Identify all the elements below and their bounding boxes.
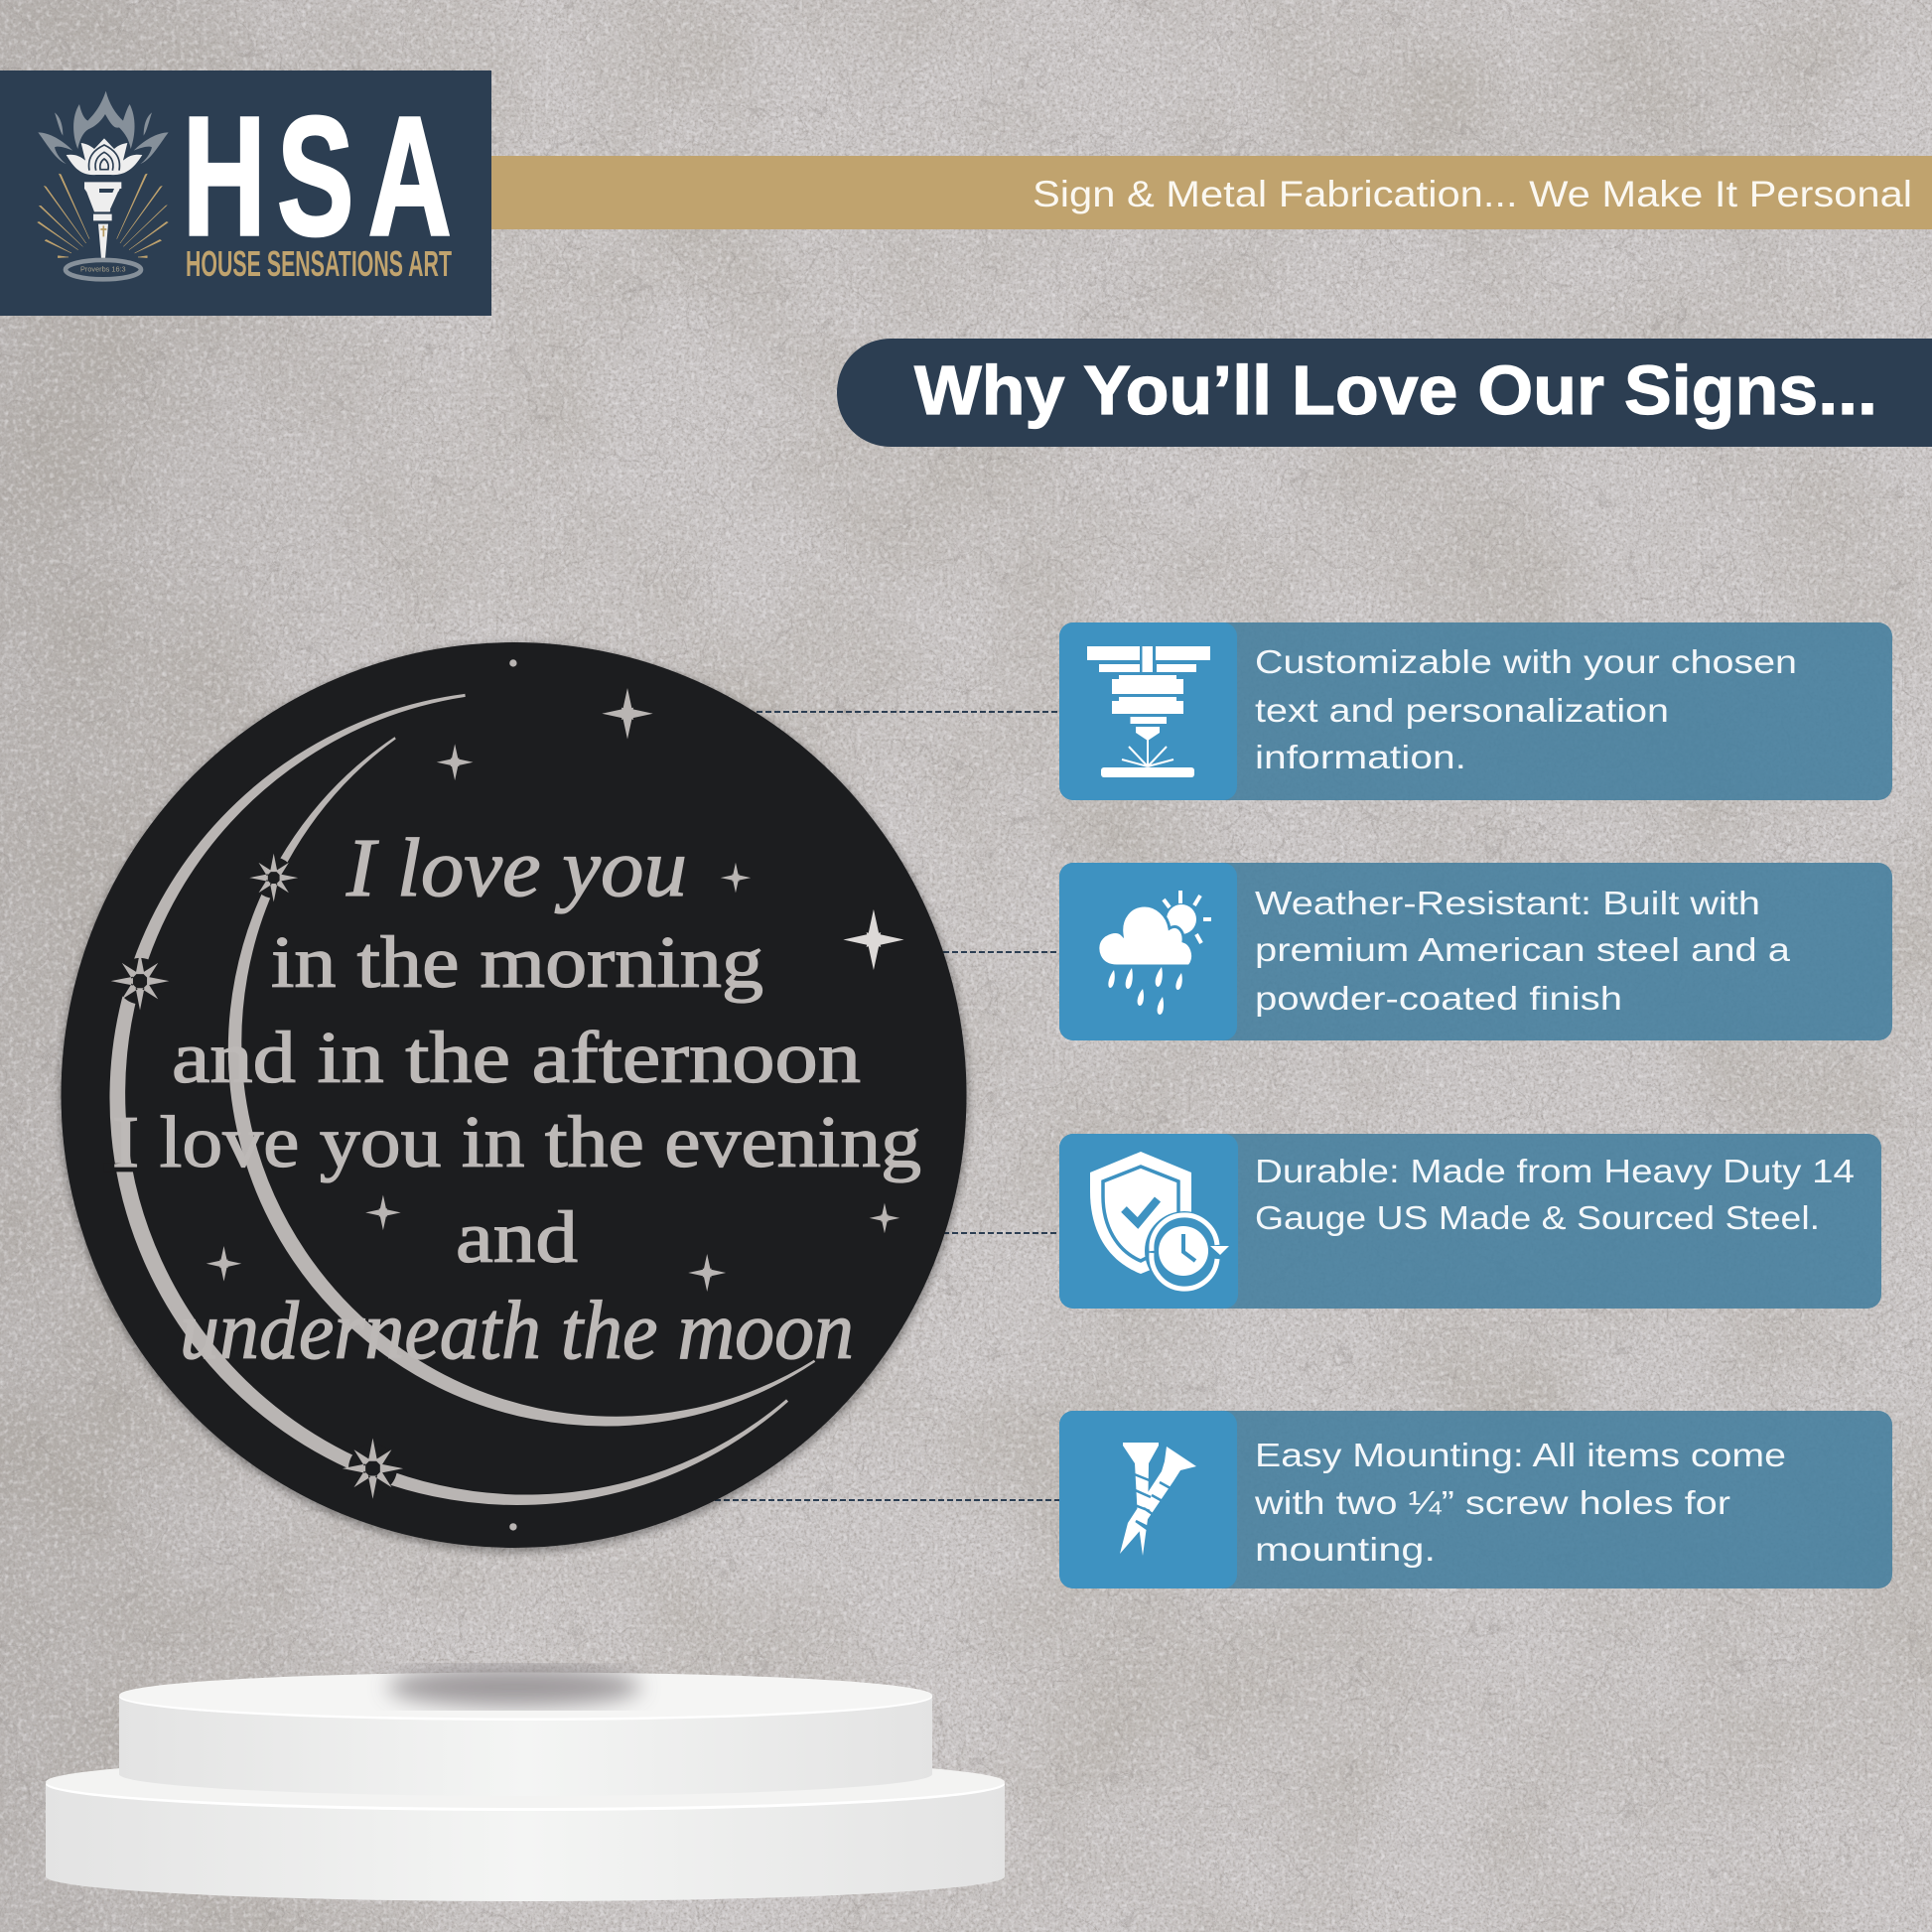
metal moon sign — [60, 642, 969, 1553]
proverbs caption: Proverbs 16:3 — [80, 265, 126, 274]
sign lettering: and — [456, 1197, 578, 1279]
sign lettering: I love you — [345, 822, 687, 914]
gold tagline bar — [491, 156, 1932, 229]
moon crescents and stars — [103, 659, 904, 1531]
brand subtitle: HOUSE SENSATIONS ART — [186, 243, 452, 284]
card text: Gauge US Made & Sourced Steel. — [1255, 1199, 1820, 1236]
feature card: durable — [1059, 1134, 1881, 1309]
brand name HSA: HSA — [183, 81, 451, 270]
card text: Easy Mounting: All items come — [1255, 1437, 1786, 1473]
icon: screws — [1120, 1443, 1196, 1556]
card text: Customizable with your chosen — [1255, 643, 1797, 680]
sign lettering — [112, 822, 921, 1377]
card text — [1255, 1153, 1855, 1236]
heading text: Why You’ll Love Our Signs... — [914, 351, 1877, 429]
podium — [46, 1667, 1005, 1901]
upper tier — [119, 1672, 932, 1796]
sign lettering: underneath the moon — [180, 1285, 854, 1377]
sign lettering: and in the afternoon — [172, 1018, 861, 1099]
tagline text: Sign & Metal Fabrication... We Make It Personal — [1033, 174, 1912, 214]
logo panel — [0, 70, 491, 316]
feature card: easy mounting — [1059, 1411, 1892, 1588]
sign lettering: in the morning — [271, 922, 763, 1004]
sign lettering: I love you in the evening — [112, 1102, 921, 1183]
card text: Durable: Made from Heavy Duty 14 — [1255, 1153, 1855, 1189]
card text: Weather-Resistant: Built with — [1255, 885, 1760, 921]
icon: torch logo — [38, 91, 169, 279]
card text: mounting. — [1255, 1531, 1436, 1568]
sign shadow — [387, 1667, 641, 1707]
icon: laser cutter — [1087, 646, 1210, 777]
card text — [1255, 643, 1797, 775]
icon: weather — [1098, 891, 1211, 1015]
card text — [1254, 1437, 1786, 1568]
feature card: weather-resistant — [1059, 863, 1892, 1040]
card text: powder-coated finish — [1255, 980, 1622, 1017]
icon: shield and clock — [1090, 1152, 1229, 1291]
feature card: customizable — [1059, 622, 1892, 800]
lower tier — [46, 1756, 1005, 1901]
leader lines — [715, 712, 1059, 1500]
card text: text and personalization — [1255, 692, 1669, 729]
card text — [1255, 885, 1791, 1017]
card text: with two ¼” screw holes for — [1254, 1484, 1730, 1521]
card text: premium American steel and a — [1255, 931, 1791, 968]
card text: information. — [1255, 739, 1466, 775]
heading pill — [837, 339, 1932, 447]
